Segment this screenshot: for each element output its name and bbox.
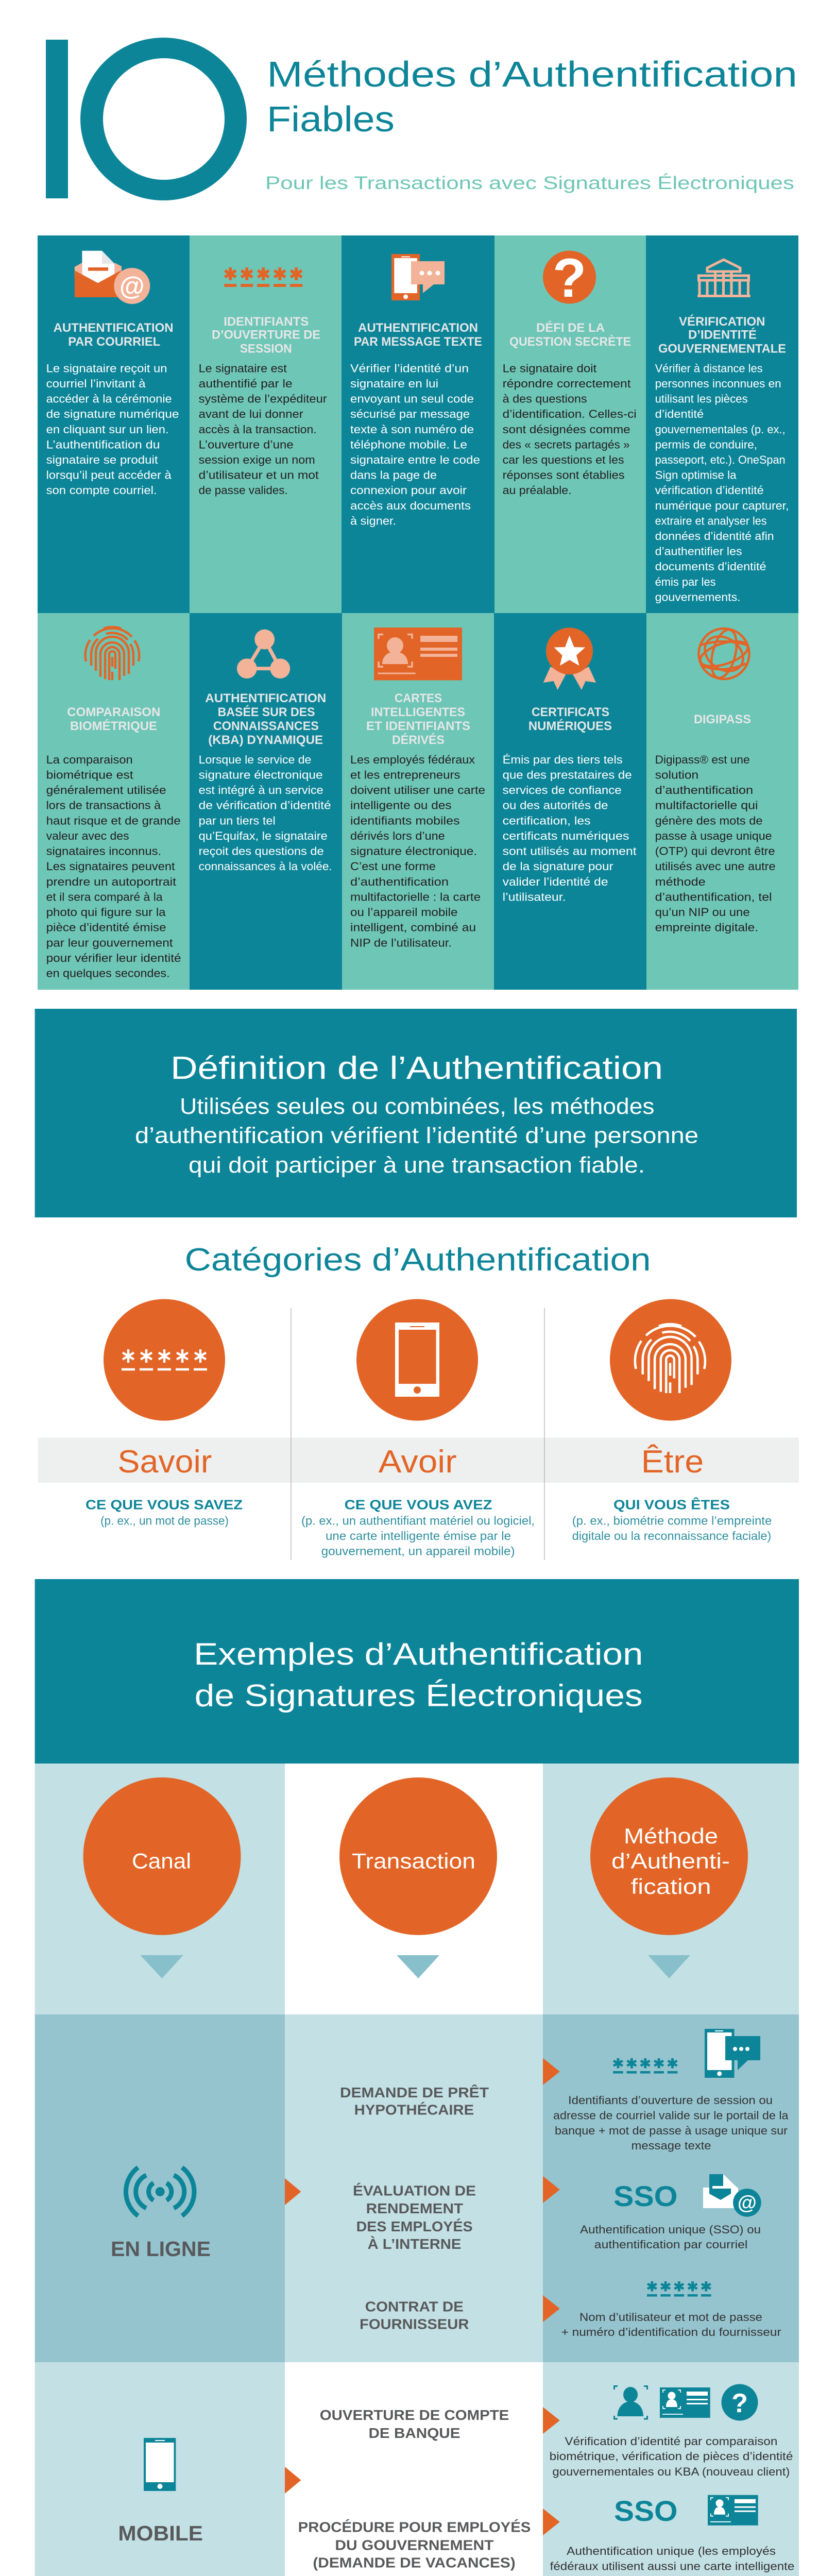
description: NIP de l’utilisateur. (350, 936, 452, 949)
description: Vérifier à distance les (655, 362, 763, 375)
transactions: (DEMANDE DE VACANCES) (313, 2554, 516, 2570)
description: prendre un autoportrait (46, 875, 176, 888)
example text: une carte intelligente émise par le (326, 1529, 511, 1543)
description: C’est une forme (350, 860, 436, 873)
heading: VÉRIFICATION (679, 314, 765, 329)
description: au préalable. (503, 484, 572, 497)
description: d’identité (655, 408, 704, 420)
heading: BIOMÉTRIQUE (70, 719, 157, 733)
panel: exemples d'authentification (35, 1579, 799, 2576)
description: à signer. (350, 514, 396, 527)
method: session credentials and text message: adresse de courriel valide sur le portail de la (553, 2109, 789, 2122)
description: émis par les (655, 575, 716, 588)
description: certification, les (503, 814, 591, 827)
description: ou l’appareil mobile (350, 906, 457, 919)
description (503, 362, 637, 497)
heading: COMPARAISON (67, 705, 160, 719)
title (267, 54, 797, 139)
description: que des prestataires de (503, 768, 632, 781)
arrow (285, 2467, 301, 2494)
description: Lorsque le service de (199, 753, 311, 766)
description: signataire se produit (46, 453, 158, 466)
icon: award badge (543, 628, 596, 690)
description: reçoit des questions de (199, 845, 324, 858)
method: SSO and smart card (543, 2495, 794, 2576)
method: session credentials and text message (543, 2029, 789, 2152)
icon: password asterisks (224, 267, 302, 285)
description: passe à usage unique (655, 829, 772, 842)
heading: QUESTION SECRÈTE (509, 334, 631, 349)
heading: PAR COURRIEL (68, 335, 160, 349)
description: Vérifier l’identité d’un (350, 362, 469, 375)
header: big 10 and title (46, 38, 797, 200)
method: biometric, ID, KBA (543, 2384, 793, 2478)
description: avant de lui donner (199, 408, 303, 420)
description: Digipass® est une (655, 753, 750, 766)
description: son compte courriel. (46, 484, 157, 497)
heading (67, 705, 160, 733)
description: dans la page de (350, 469, 437, 482)
row: mobile (35, 2362, 799, 2576)
transactions: À L’INTERNE (368, 2236, 461, 2252)
description: connexion pour avoir (350, 484, 467, 497)
description: certificats numériques (503, 829, 629, 842)
description: de signature numérique (46, 408, 179, 420)
icon: government building (697, 260, 750, 296)
row: en ligne (35, 2014, 799, 2362)
description: Les employés fédéraux (350, 753, 475, 766)
heading (354, 321, 482, 349)
column head: canal (83, 1777, 241, 1978)
description: multifactorielle : la carte (350, 890, 481, 904)
description: d’utilisateur et un mot (199, 469, 319, 482)
description: multifactorielle qui (655, 799, 758, 812)
column head: méthode d'authentification: d’Authenti- (611, 1849, 730, 1873)
label: Être (641, 1444, 704, 1480)
transactions: HYPOTHÉCAIRE (354, 2102, 474, 2117)
transactions: OUVERTURE DE COMPTE (320, 2407, 509, 2423)
description: méthode (655, 875, 706, 888)
panel: authentification par courriel (38, 235, 190, 613)
heading: ET IDENTIFIANTS (366, 719, 470, 733)
description (655, 753, 776, 934)
method: biometric, ID, KBA: biométrique, vérification de pièces d’identité (550, 2450, 793, 2463)
method: session credentials and text message: banque + mot de passe à usage unique sur (555, 2124, 788, 2137)
heading (54, 321, 174, 349)
heading banner (35, 1579, 799, 1764)
description: d’authentifier les (655, 545, 742, 558)
description (350, 753, 485, 949)
description: (OTP) qui devront être (655, 845, 775, 858)
description: réponses sont établies (503, 469, 625, 482)
method: session credentials and text message: message texte (632, 2139, 711, 2152)
description: accès aux documents (350, 499, 471, 512)
transactions: CONTRAT DE (365, 2299, 464, 2315)
method: username and password: + numéro d’identification du fournisseur (561, 2326, 781, 2338)
description: solution (655, 768, 698, 781)
heading: BASÉE SUR DES (218, 705, 315, 719)
example text: gouvernement, un appareil mobile) (321, 1545, 515, 1558)
description: de la signature pour (503, 860, 613, 873)
description: biométrique est (46, 768, 133, 781)
heading: CARTES (395, 691, 442, 705)
description (655, 362, 789, 603)
subheading: QUI VOUS ÊTES (613, 1497, 730, 1513)
transactions: DE BANQUE (369, 2425, 460, 2441)
definition text: Utilisées seules ou combinées, les méthodes (180, 1094, 654, 1119)
description: gouvernements. (655, 590, 741, 603)
heading (509, 320, 631, 349)
category: être (572, 1299, 772, 1543)
description: et les entrepreneurs (350, 768, 460, 781)
description: La comparaison (46, 753, 133, 766)
description: L’authentification du (46, 438, 160, 451)
heading: IDENTIFIANTS (224, 315, 309, 329)
description: accès à la transaction. (199, 423, 317, 436)
description: permis de conduire, (655, 438, 757, 451)
transactions: DEMANDE DE PRÊT (340, 2084, 489, 2100)
heading: D’OUVERTURE DE (212, 328, 320, 342)
heading (528, 705, 612, 733)
panel: digipass (646, 613, 798, 990)
transactions (340, 2084, 489, 2332)
example text (301, 1514, 535, 1558)
description: photo qui figure sur la (46, 906, 166, 919)
transactions (298, 2407, 531, 2570)
heading: AUTHENTIFICATION (205, 691, 326, 705)
description: téléphone mobile. Le (350, 438, 467, 451)
description: intelligent, combiné au (350, 921, 476, 934)
example text: (p. ex., biométrie comme l’empreinte (572, 1514, 772, 1528)
title: Méthodes d’Authentification (267, 54, 797, 94)
icon: wireless signal (126, 2167, 194, 2216)
panel: identifiants d'ouverture de session (190, 235, 342, 613)
method: SSO or email: authentification par courriel (594, 2238, 747, 2251)
heading: CONNAISSANCES (213, 719, 319, 733)
description: utilisant les pièces (655, 393, 748, 405)
description: et il sera comparé à la (46, 890, 163, 904)
description: numérique pour capturer, (655, 499, 789, 512)
description: signataire en lui (350, 377, 438, 390)
method: SSO and smart card: fédéraux utilisent aussi une carte intelligente (550, 2560, 794, 2573)
method: username and password: Nom d’utilisateur et mot de passe (579, 2311, 762, 2324)
description: texte à son numéro de (350, 423, 474, 436)
description: signataire entre le code (350, 453, 480, 466)
panel: défi de la question secrète (494, 235, 646, 613)
numeral 10 (46, 38, 247, 200)
icon: connected nodes (237, 630, 290, 679)
description: d’authentification (350, 875, 449, 888)
description: extraire et analyser les (655, 514, 767, 527)
heading: (KBA) DYNAMIQUE (208, 733, 323, 747)
description: qu’Equifax, le signataire (199, 829, 328, 842)
icon: fingerprint (86, 627, 139, 680)
description (46, 753, 181, 980)
description: d’authentification, tel (655, 890, 772, 904)
description: passeport, etc.). OneSpan (655, 453, 786, 466)
description: ou des autorités de (503, 799, 608, 812)
description: est intégré à un service (199, 784, 323, 796)
heading: INTELLIGENTES (371, 705, 465, 719)
method: SSO or email: SSO (613, 2180, 678, 2212)
column head: transaction (339, 1777, 497, 1978)
heading: Catégories d’Authentification (185, 1242, 651, 1278)
icon: question mark (543, 247, 596, 309)
example text: (p. ex., un mot de passe) (100, 1514, 229, 1528)
subheading: CE QUE VOUS SAVEZ (86, 1497, 243, 1513)
icon: globe (697, 627, 750, 681)
description: de passe valides. (199, 484, 288, 497)
description: session exige un nom (199, 453, 315, 466)
description: répondre correctement (503, 377, 631, 390)
heading banner: Exemples d’Authentification (194, 1637, 643, 1671)
description: à des questions (503, 393, 587, 405)
panel: catégories d'authentification (38, 1242, 799, 1560)
heading: GOUVERNEMENTALE (658, 342, 786, 356)
description: données d’identité afin (655, 530, 774, 543)
heading: NUMÉRIQUES (528, 719, 612, 733)
column head: méthode d'authentification: Méthode (624, 1824, 718, 1848)
method: biometric, ID, KBA: ? (731, 2388, 748, 2418)
description: en quelques secondes. (46, 967, 170, 980)
label: Avoir (379, 1444, 457, 1480)
description: sont utilisés au moment (503, 845, 637, 858)
panel: comparaison biométrique (38, 613, 190, 990)
panel: certificats numériques (494, 613, 646, 990)
method: SSO or email (543, 2174, 761, 2251)
description: L’ouverture d’une (199, 438, 294, 451)
description: l’utilisateur. (503, 890, 566, 904)
panel: authentification par message texte (342, 235, 494, 613)
description: connaissances à la volée. (199, 860, 332, 873)
description: intelligente ou des (350, 799, 452, 812)
column head: transaction: Transaction (352, 1849, 475, 1873)
description: gouvernementales (p. ex., (655, 423, 786, 436)
heading: DÉFI DE LA (536, 320, 605, 335)
transactions: DES EMPLOYÉS (356, 2218, 473, 2234)
description: Le signataire reçoit un (46, 362, 167, 375)
example text: (p. ex., un authentifiant matériel ou logiciel, (301, 1514, 535, 1528)
heading: AUTHENTIFICATION (358, 321, 478, 335)
icon: ID card (374, 628, 462, 680)
column head: méthode d'authentification (590, 1777, 748, 1978)
method: SSO or email: @ (738, 2192, 757, 2214)
description: Émis par des tiers tels (503, 753, 623, 766)
example text (572, 1514, 772, 1543)
description: valeur avec des (46, 829, 129, 842)
icon: fingerprint in circle (610, 1299, 731, 1421)
subheading: CE QUE VOUS AVEZ (345, 1497, 492, 1513)
description: d’identification. Celles-ci (503, 408, 637, 420)
heading: Définition de l’Authentification (170, 1050, 663, 1086)
arrow (285, 2178, 301, 2205)
description: empreinte digitale. (655, 921, 758, 934)
heading: PAR MESSAGE TEXTE (354, 335, 482, 349)
description: par leur gouvernement (46, 936, 173, 949)
method: biometric, ID, KBA: Vérification d’identité par comparaison (565, 2435, 777, 2448)
description: pièce d’identité émise (46, 921, 166, 934)
heading: D’IDENTITÉ (688, 328, 757, 342)
description: qu’un NIP ou une (655, 906, 750, 919)
description: sont désignées comme (503, 423, 630, 436)
transactions: RENDEMENT (366, 2200, 463, 2216)
channel label: EN LIGNE (111, 2237, 211, 2261)
panel: ten authentication methods (38, 235, 798, 990)
method: SSO and smart card: Authentification unique (les employés (567, 2545, 776, 2557)
description: utilisés avec une autre (655, 860, 776, 873)
description: d’authentification (655, 784, 753, 796)
channel label: MOBILE (118, 2521, 203, 2545)
description: dérivés lors d’une (350, 829, 445, 842)
description: signature électronique (199, 768, 323, 781)
heading: DIGIPASS (694, 713, 751, 726)
description (350, 362, 480, 527)
column head: méthode d'authentification: fication (631, 1874, 711, 1899)
description: généralement utilisée (46, 784, 166, 796)
description: car les questions et les (503, 453, 624, 466)
description: de vérification d’identité (199, 799, 331, 812)
definition text (135, 1094, 698, 1178)
description: identifiants mobiles (350, 814, 459, 827)
description (199, 753, 332, 873)
description: génère des mots de (655, 814, 763, 827)
method: SSO or email: Authentification unique (SSO) ou (580, 2223, 761, 2236)
icon: smartphone (144, 2438, 176, 2491)
description: Le signataire doit (503, 362, 596, 375)
category: savoir (86, 1299, 243, 1528)
definition text: qui doit participer à une transaction fiable. (189, 1153, 645, 1178)
category: avoir (301, 1299, 535, 1558)
description: lors de transactions à (46, 799, 161, 812)
description: des « secrets partagés » (503, 438, 630, 451)
heading banner: de Signatures Électroniques (195, 1679, 643, 1713)
description: personnes inconnues en (655, 377, 781, 390)
description: Le signataire est (199, 362, 287, 375)
description: services de confiance (503, 784, 622, 796)
panel: définition de l'authentification (35, 1009, 797, 1217)
heading (366, 691, 470, 747)
example text: digitale ou la reconnaissance faciale) (572, 1529, 771, 1543)
description: valider l’identité de (503, 875, 608, 888)
method: SSO and smart card: SSO (614, 2495, 678, 2527)
description: sécurisé par message (350, 408, 470, 420)
method: biometric, ID, KBA: gouvernementales ou KBA (nouveau client) (552, 2465, 790, 2478)
definition text: d’authentification vérifient l’identité d’une personne (135, 1123, 698, 1148)
transactions: FOURNISSEUR (360, 2316, 469, 2332)
description: signature électronique. (350, 845, 477, 858)
description: lorsqu’il peut accéder à (46, 469, 172, 482)
icon: envelope with at sign: @ (120, 272, 145, 300)
method: session credentials and text message: Identifiants d’ouverture de session ou (568, 2094, 773, 2107)
panel: authentification basée sur des connaissances (190, 613, 342, 990)
panel: cartes intelligentes et identifiants dérivés (342, 613, 494, 990)
description: courriel l’invitant à (46, 377, 146, 390)
heading: SESSION (240, 342, 292, 356)
description: doivent utiliser une carte (350, 784, 485, 796)
heading (212, 315, 320, 356)
title: Fiables (267, 99, 395, 139)
heading (205, 691, 326, 747)
heading: AUTHENTIFICATION (54, 321, 174, 335)
description: Les signataires peuvent (46, 860, 175, 873)
description: authentifié par le (199, 377, 293, 390)
heading: CERTIFICATS (532, 705, 609, 719)
label: Savoir (117, 1444, 212, 1480)
heading: DÉRIVÉS (392, 733, 445, 747)
column head: canal: Canal (132, 1849, 191, 1873)
description: signataires inconnus. (46, 845, 161, 858)
description: accéder à la cérémonie (46, 393, 172, 405)
description: envoyant un seul code (350, 393, 474, 405)
column headers (35, 1764, 799, 2014)
description: haut risque et de grande (46, 814, 181, 827)
description (199, 362, 327, 497)
transactions: PROCÉDURE POUR EMPLOYÉS (298, 2519, 531, 2535)
panel: vérification d'identité gouvernementale (646, 235, 798, 613)
subtitle: Pour les Transactions avec Signatures Électroniques (265, 173, 794, 193)
description (503, 753, 637, 904)
description: documents d’identité (655, 560, 766, 573)
description (46, 362, 179, 497)
heading (658, 314, 786, 356)
icon: question mark: ? (553, 247, 586, 309)
description: par un tiers tel (199, 814, 276, 827)
description: système de l’expéditeur (199, 393, 327, 405)
icon: password in circle (104, 1299, 225, 1421)
method: username and password (543, 2281, 781, 2338)
icon: envelope with at sign (75, 251, 150, 304)
icon: phone in circle (356, 1299, 478, 1421)
icon: phone with chat bubble (391, 254, 445, 300)
transactions: ÉVALUATION DE (353, 2183, 476, 2199)
description: Sign optimise la (655, 469, 737, 482)
description: pour vérifier leur identité (46, 952, 181, 964)
description: vérification d’identité (655, 484, 764, 497)
transactions: DU GOUVERNEMENT (335, 2537, 493, 2553)
description: en cliquant sur un lien. (46, 423, 169, 436)
